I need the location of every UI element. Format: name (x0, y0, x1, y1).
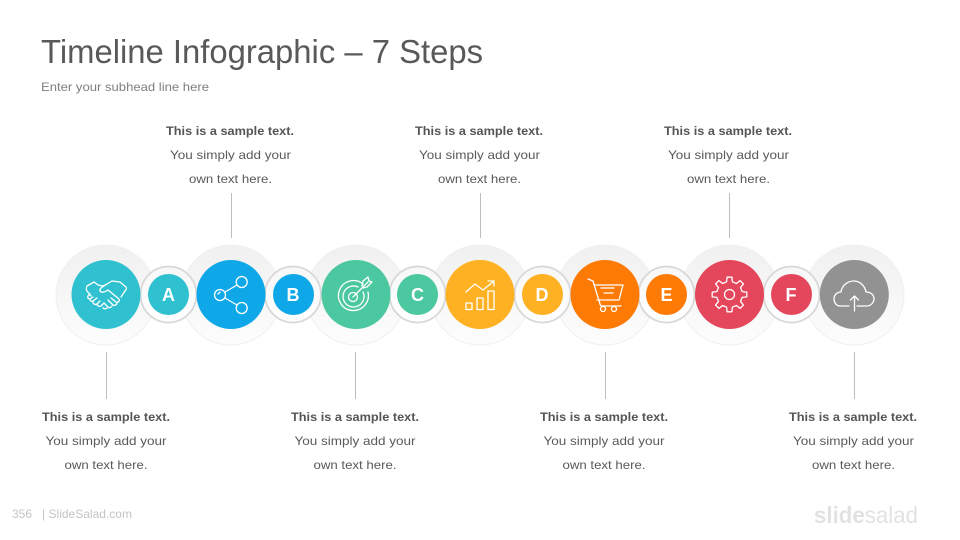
circle: step 7 (820, 260, 889, 329)
halo: step 6 (680, 245, 780, 345)
circle: step 5 (570, 260, 640, 329)
halo: step 3 (306, 245, 406, 345)
text block: step 3: You simply add your (294, 434, 416, 448)
halo: step 4 (430, 245, 530, 345)
badge E: E (660, 285, 673, 305)
text block: step 2: You simply add your (170, 148, 291, 162)
text block: step 7: This is a sample text. (789, 410, 917, 424)
icon: gear (712, 277, 747, 312)
badge B (273, 274, 314, 315)
badge C (397, 274, 438, 315)
text block: step 1: This is a sample text. (42, 410, 170, 424)
connector 2 (230, 193, 232, 238)
icon: growth chart (466, 281, 494, 310)
connector 7 (854, 352, 856, 399)
icon: handshake (86, 281, 126, 309)
icon: cart (588, 279, 623, 312)
text block: step 6 (664, 124, 792, 186)
connector 6 (728, 193, 730, 238)
text block: step 6: own text here. (687, 172, 770, 186)
text block: step 6: You simply add your (668, 148, 789, 162)
halo: step 7 (804, 245, 904, 345)
halo: step 5 (555, 245, 655, 345)
badge A: A (162, 285, 175, 305)
subhead: Enter your subhead line here (41, 80, 209, 94)
text block: step 3: This is a sample text. (291, 410, 419, 424)
text block: step 3: own text here. (314, 458, 396, 472)
text block: step 5: This is a sample text. (540, 410, 668, 424)
text block: step 6: This is a sample text. (664, 124, 792, 138)
badge D: D (536, 285, 548, 305)
connector 4 (480, 193, 482, 238)
text block: step 7: own text here. (812, 458, 895, 472)
connector 5 (604, 352, 606, 399)
badge E (646, 274, 687, 315)
text block: step 1: own text here. (64, 458, 148, 472)
badge F: F (786, 285, 796, 305)
halo: step 1 (56, 245, 156, 345)
badge ring B (265, 266, 321, 322)
badge ring F (764, 266, 820, 322)
text block: step 5: You simply add your (544, 434, 664, 448)
circle: step 1 (72, 260, 140, 329)
text block: step 2: own text here. (189, 172, 272, 186)
circle: step 6 (695, 260, 764, 329)
badge ring E (638, 266, 694, 322)
icon: share (214, 276, 247, 314)
text block: step 2 (166, 124, 294, 186)
text block: step 4: own text here. (438, 172, 521, 186)
text block: step 1 (42, 410, 170, 472)
badge A (148, 274, 189, 315)
icon: target (338, 277, 372, 311)
text block: step 3 (291, 410, 419, 472)
badge B: B (286, 285, 300, 305)
text block: step 7: You simply add your (793, 434, 914, 448)
badge F (771, 274, 812, 315)
icon: cloud upload (834, 281, 874, 311)
connector 1 (106, 352, 108, 399)
circle: step 3 (322, 260, 390, 329)
badge ring D (514, 266, 570, 322)
text block: step 1: You simply add your (46, 434, 166, 448)
circle: step 4 (446, 260, 514, 329)
badge C: C (411, 285, 424, 305)
connector 3 (354, 352, 356, 399)
badge ring A (140, 266, 196, 322)
footer: page number and site: 356 | SlideSalad.com (12, 507, 132, 521)
footer: logo: slidesalad (814, 502, 918, 528)
title: Timeline Infographic – 7 Steps (41, 33, 483, 70)
text block: step 2: This is a sample text. (166, 124, 294, 138)
text block: step 4: You simply add your (419, 148, 540, 162)
text block: step 7 (789, 410, 917, 472)
text block: step 4: This is a sample text. (415, 124, 543, 138)
text block: step 4 (415, 124, 543, 186)
circle: step 2 (196, 260, 266, 329)
halo: step 2 (181, 245, 281, 345)
badge ring C (390, 266, 446, 322)
timeline (56, 245, 904, 345)
text block: step 5: own text here. (562, 458, 646, 472)
badge D (522, 274, 563, 315)
text block: step 5 (540, 410, 668, 472)
